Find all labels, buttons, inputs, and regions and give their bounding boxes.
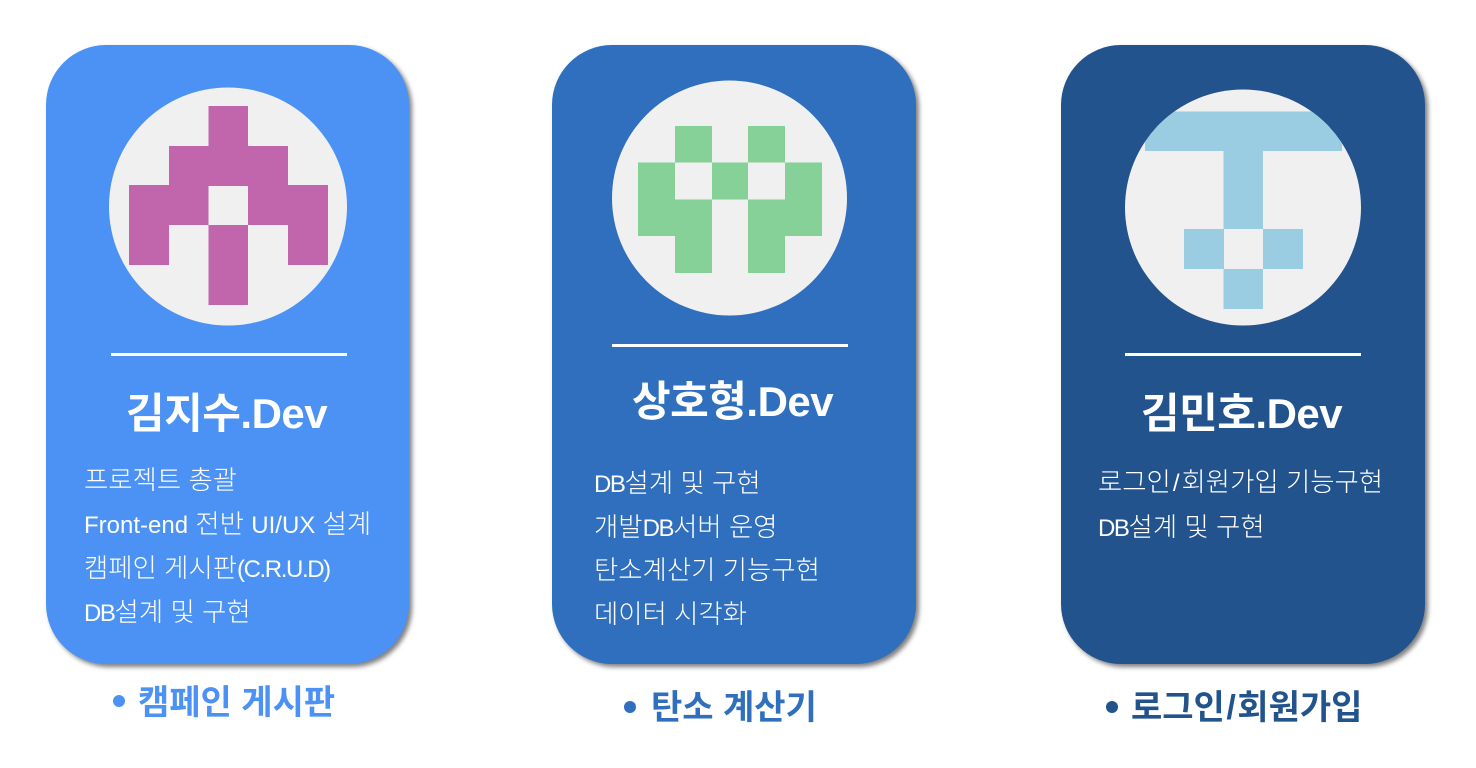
heading: 김지수.Dev: 김지수.Dev [126,390,327,437]
text block: 김지수 roles: 프로젝트 총괄 [84,465,237,495]
text block: 상호형 roles: DB설계 및 구현 [594,468,761,498]
text block: 김민호 roles [1098,467,1383,542]
divider: card 1 [110,352,346,356]
text block: 김지수 roles: Front-end 전반 UI/UX 설계 [84,509,371,539]
icon: 김민호 avatar [1125,90,1361,326]
text block: 김지수 roles: DB설계 및 구현 [84,597,251,627]
text block: 상호형 roles: 데이터 시각화 [594,599,747,629]
text block: 김민호 roles: DB설계 및 구현 [1098,512,1265,542]
divider: card 2 [612,344,848,346]
heading: 김민호.Dev: 김민호.Dev [1141,390,1342,437]
panel: 김지수 card [46,45,409,664]
divider: card 3 [1125,352,1361,356]
text block: 상호형 roles [594,468,820,629]
text block: 김민호 roles: 로그인/회원가입 기능구현 [1098,467,1383,497]
text block: 김지수 roles [84,465,371,627]
panel: 김민호 card [1061,45,1425,664]
text block: 상호형 roles: 개발DB서버 운영 [594,512,778,542]
label: 로그인/회원가입: 로그인/회원가입 [1131,689,1362,727]
text block: 상호형 roles: 탄소계산기 기능구현 [594,555,820,585]
text block: 김지수 roles: 캠페인 게시판(C.R.U.D) [84,553,330,583]
bullet: 캠페인 게시판 [113,695,125,707]
heading: 상호형.Dev: 상호형.Dev [632,378,833,425]
label: 캠페인 게시판: 캠페인 게시판 [138,684,335,722]
label: 탄소 계산기: 탄소 계산기 [651,689,817,727]
bullet: 탄소 계산기 [624,701,636,713]
bullet: 로그인/회원가입 [1106,701,1118,713]
panel: 상호형 card [552,45,916,664]
